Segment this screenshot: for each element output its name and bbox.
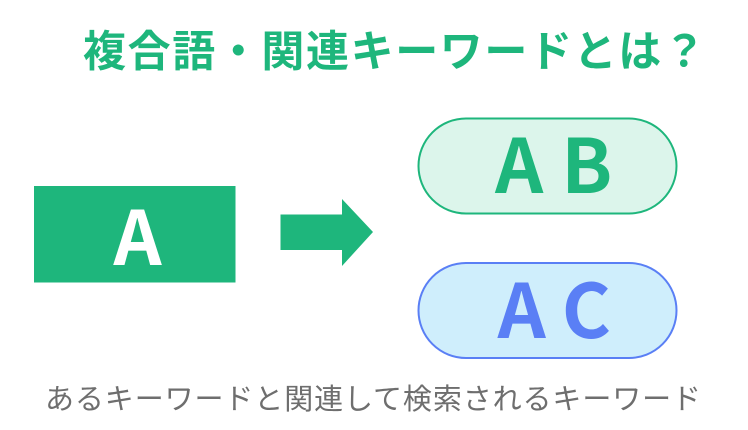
label: AB: A B	[494, 106, 613, 215]
pill: AB	[418, 106, 676, 215]
caption: あるキーワードと関連して検索されるキーワード	[45, 376, 702, 418]
arrow	[280, 199, 373, 266]
box: keyword A	[34, 178, 236, 287]
title: 複合語・関連キーワードとは？	[83, 18, 707, 80]
label: AC: A C	[497, 251, 610, 360]
label: A: A	[112, 178, 162, 287]
pill: AC	[418, 251, 676, 360]
